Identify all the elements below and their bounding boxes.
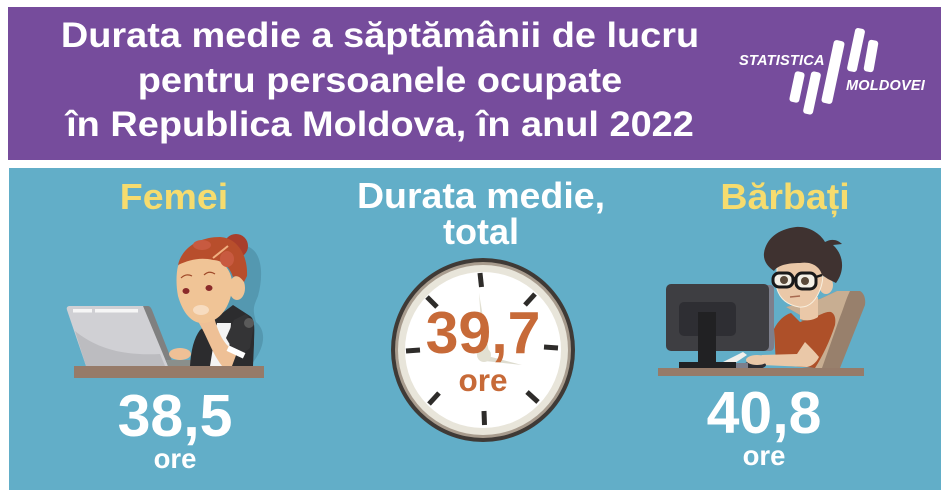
illustration: woman at laptop bbox=[66, 234, 264, 378]
title bbox=[61, 16, 699, 144]
hand on keyboard bbox=[744, 361, 766, 369]
heading: Femei: Femei bbox=[120, 176, 228, 217]
heading: Durata medie, total: total bbox=[443, 210, 519, 252]
value: women: 38,5 bbox=[118, 383, 232, 449]
heading: Durata medie, total: Durata medie, bbox=[357, 174, 605, 216]
head bbox=[819, 276, 833, 294]
illustration: clock bbox=[391, 258, 575, 442]
unit: men: ore bbox=[743, 440, 785, 471]
arm bbox=[759, 342, 819, 367]
heading: Bărbați: Bărbați bbox=[720, 176, 850, 217]
laptop bbox=[67, 306, 168, 366]
illustration: man at computer bbox=[658, 226, 866, 376]
title: pentru persoanele ocupate bbox=[138, 60, 622, 100]
shirt bbox=[774, 312, 835, 368]
value: total: 39,7 bbox=[426, 300, 540, 366]
value: men: 40,8 bbox=[707, 380, 821, 446]
title: în Republica Moldova, în anul 2022 bbox=[66, 105, 694, 144]
main panel bbox=[9, 168, 941, 490]
white paper bbox=[723, 352, 747, 363]
logo: Statistica Moldovei: MOLDOVEI bbox=[846, 78, 926, 94]
head bbox=[229, 276, 245, 300]
neck bbox=[800, 297, 818, 320]
shadow bbox=[210, 246, 263, 366]
tick marks bbox=[406, 273, 558, 425]
hand on laptop bbox=[169, 348, 191, 360]
clock hands bbox=[479, 293, 489, 353]
title: Durata medie a săptămânii de lucru bbox=[61, 16, 699, 55]
logo: Statistica Moldovei bbox=[739, 28, 926, 114]
heading: Durata medie, total bbox=[357, 174, 605, 252]
header banner bbox=[8, 7, 941, 160]
desk bbox=[74, 366, 264, 378]
glasses bbox=[773, 273, 793, 287]
unit: women: ore bbox=[154, 442, 196, 474]
hair bbox=[764, 227, 842, 283]
desk bbox=[658, 368, 864, 376]
monitor bbox=[684, 285, 774, 351]
chair bbox=[786, 291, 865, 368]
forearm bbox=[195, 313, 238, 366]
hair bbox=[224, 234, 248, 258]
unit: total: ore bbox=[458, 362, 508, 398]
jacket bbox=[190, 305, 254, 366]
logo: Statistica Moldovei: STATISTICA bbox=[739, 53, 825, 69]
eyes bbox=[182, 288, 190, 294]
